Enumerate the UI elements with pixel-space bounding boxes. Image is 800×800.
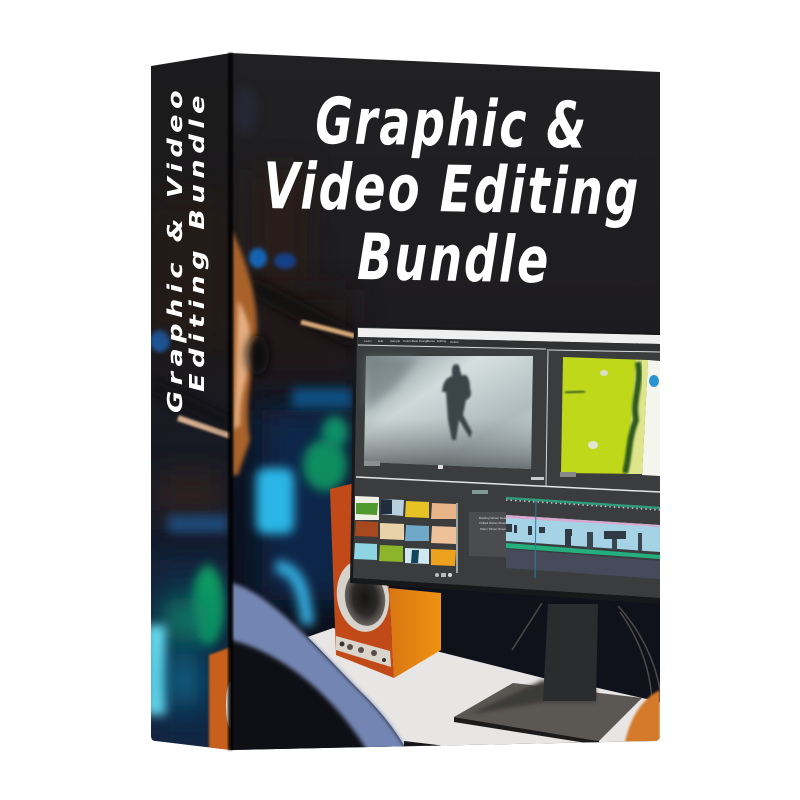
- left side panel of box: [151, 53, 231, 750]
- timeline panel: [469, 490, 660, 579]
- blue sleeve: [231, 583, 408, 752]
- front panel of box: [231, 50, 661, 755]
- preview panel: dancing couple: [364, 356, 533, 469]
- menu bar: Best Design: [412, 339, 429, 343]
- menu bar: Name: [427, 339, 435, 343]
- front panel blurred studio background: [232, 86, 355, 625]
- keyboard edge: [404, 741, 442, 746]
- title on front panel: Graphic &: [315, 85, 589, 164]
- title on front panel: Video Editing: [263, 150, 641, 231]
- product box illustration: [151, 51, 660, 752]
- menu bar: [358, 328, 660, 352]
- media thumbnails grid: [354, 496, 458, 577]
- spine title on left panel: Editing Bundle: [185, 90, 209, 392]
- panel dividers: [356, 477, 660, 492]
- monitor stand: [454, 603, 660, 745]
- orange speaker: [330, 483, 441, 678]
- timeline panel: Warm Winter Road: [480, 527, 506, 531]
- preview panel: aerial field: [560, 357, 660, 477]
- desk surface: [299, 628, 660, 752]
- hand: [625, 690, 660, 745]
- spine title on left panel: [163, 85, 209, 413]
- timeline panel: Chilled Winter Road: [479, 521, 506, 525]
- dark wall behind monitor stand: [438, 590, 660, 705]
- menu bar: Learn: [364, 339, 372, 343]
- left panel blurred studio photo: [151, 328, 231, 750]
- spine title on left panel: Graphic & Video: [163, 85, 187, 413]
- box spine crease shadow: [228, 53, 233, 750]
- menu bar: Editing: [437, 339, 447, 343]
- menu bar: Online: [450, 340, 459, 344]
- menu bar: Edit: [378, 339, 383, 343]
- menu bar: Colors: [403, 339, 412, 343]
- menu bar: Sample: [390, 339, 401, 343]
- monitor screen: [353, 327, 660, 598]
- title on front panel: Bundle: [357, 221, 551, 298]
- title on front panel: [263, 85, 641, 298]
- monitor bezel: [350, 325, 660, 604]
- timeline panel: Bustling Winter Road: [479, 516, 508, 520]
